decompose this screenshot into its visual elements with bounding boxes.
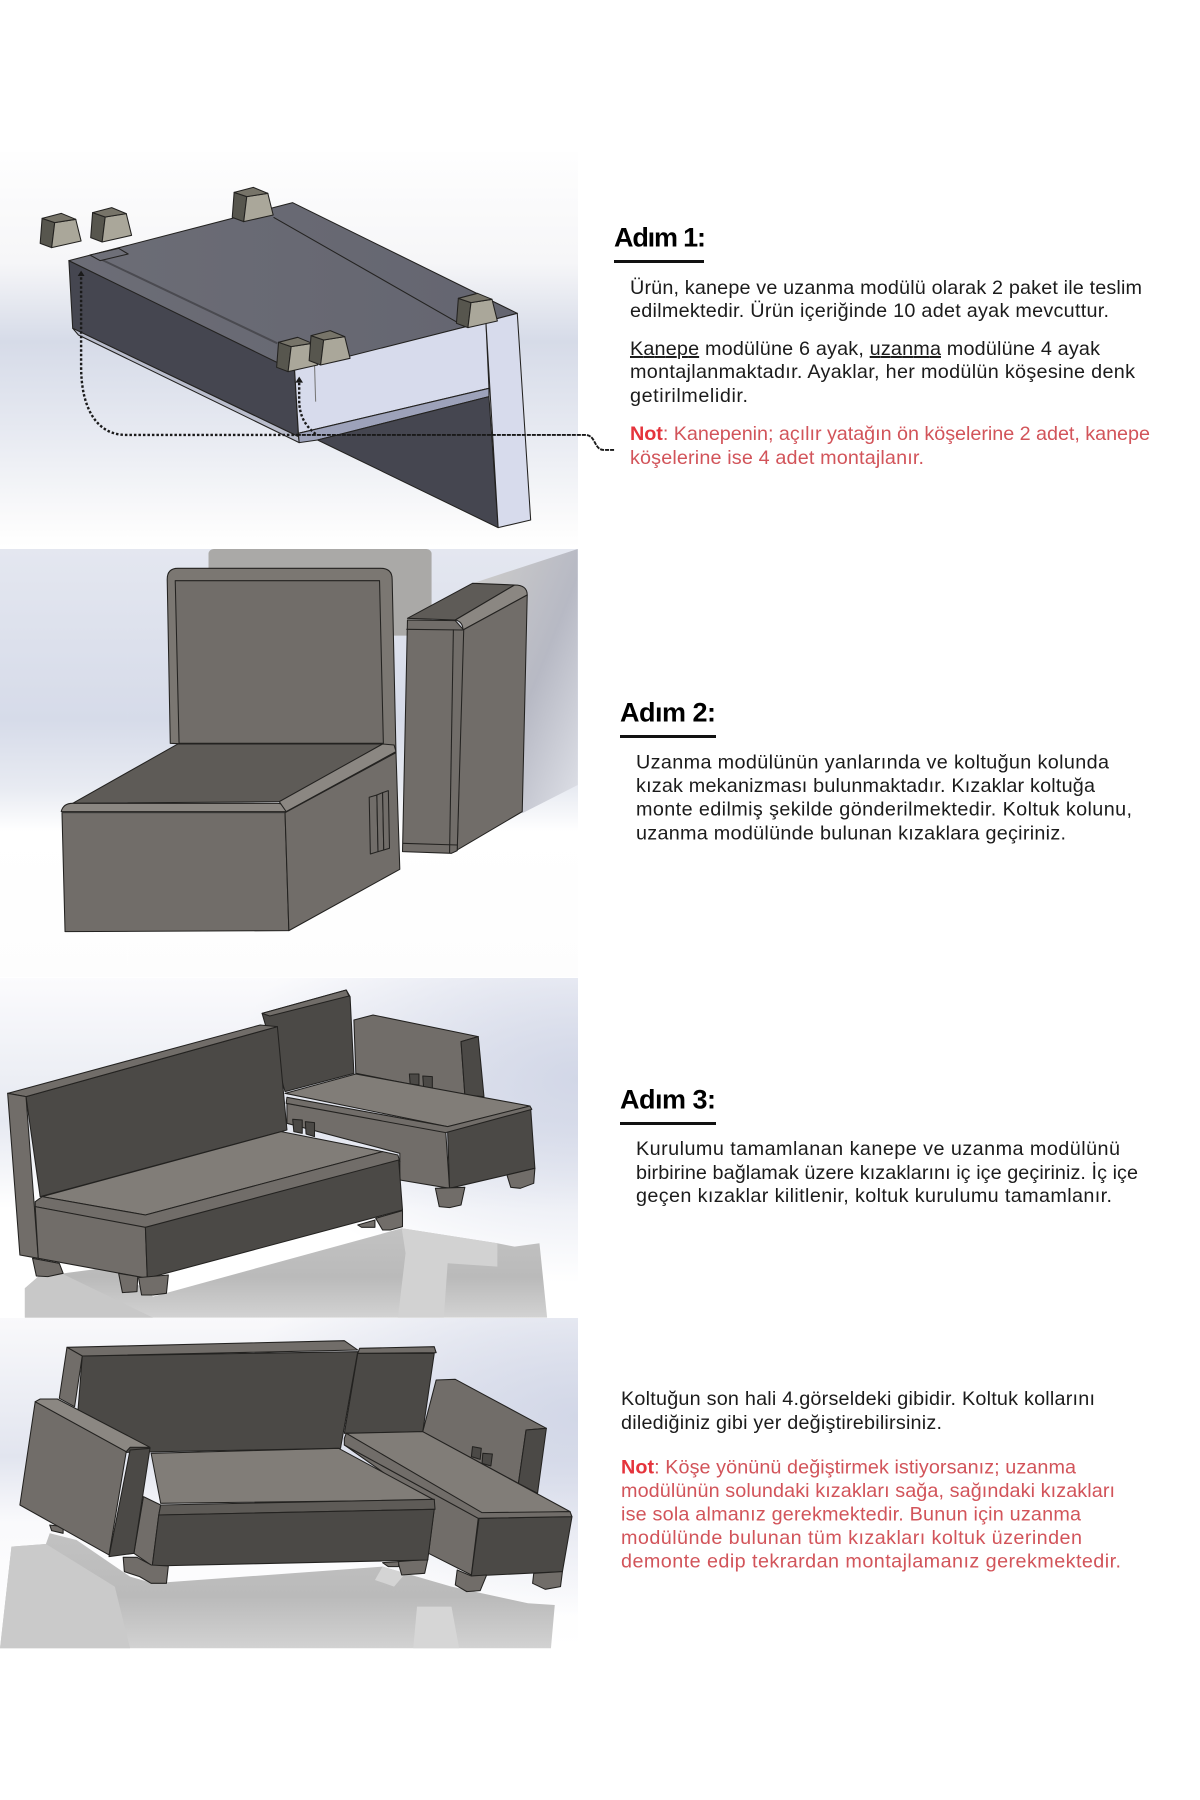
note: changing corner direction: ise sola almanız gerekmektedir. Bunun için uzanma [621, 1504, 1081, 1526]
step 4 text block: dilediğiniz gibi yer değiştirebilirsiniz. [621, 1412, 942, 1434]
panel: step 2 illustration, armchair module and arm [0, 549, 578, 977]
heading: Adım 2: Adım 2: [620, 698, 716, 728]
step 2 text block: kızak mekanizması bulunmaktadır. Kızaklar koltuğa [636, 775, 1095, 797]
arrowhead: rear [78, 271, 85, 276]
step 1 text block: köşelerine ise 4 adet montajlanır. [630, 447, 924, 469]
step 4 text block [621, 1388, 1121, 1572]
step 1 text block [614, 222, 1150, 469]
floor reflection [25, 1228, 547, 1318]
note: changing corner direction: Not: Köşe yönünü değiştirmek istiyorsanız; uzanma [621, 1456, 1076, 1478]
right chaise module [344, 1347, 572, 1592]
step 1 text block: edilmektedir. Ürün içeriğinde 10 adet ayak mevcuttur. [630, 300, 1109, 322]
heading: Adım 1: Adım 1: [614, 222, 706, 252]
floor reflection [0, 1533, 555, 1648]
left armrest [20, 1399, 150, 1557]
step 2 text block [620, 698, 1132, 844]
note: changing corner direction: demonte edip tekrardan montajlamanız gerekmektedir. [621, 1550, 1121, 1572]
step 3 text block: Kurulumu tamamlanan kanepe ve uzanma modülünü [636, 1138, 1120, 1160]
arm module [402, 583, 527, 853]
step 2 text block: uzanma modülünde bulunan kızaklara geçiriniz. [636, 822, 1066, 844]
step 1 text block: getirilmelidir. [630, 385, 748, 407]
centre seat [123, 1448, 435, 1583]
panel: step 1 illustration, sofa base with feet [0, 152, 614, 547]
note: changing corner direction: modülünde bulunan tüm kızakları koltuk üzerinden [621, 1527, 1082, 1549]
icon: sofa foot [309, 331, 350, 365]
step 1 text block: Ürün, kanepe ve uzanma modülü olarak 2 paket ile teslim [630, 277, 1142, 299]
front module [8, 1025, 402, 1295]
note: changing corner direction [621, 1456, 1121, 1572]
note: changing corner direction: modülünün solundaki kızakları sağa, sağındaki kızakları [621, 1480, 1115, 1502]
step 1 text block: montajlanmaktadır. Ayaklar, her modülün köşesine denk [630, 361, 1135, 383]
icon: sofa foot [40, 213, 81, 248]
icon: sofa foot [277, 337, 318, 372]
heading: Adım 3: Adım 3: [620, 1084, 716, 1114]
panel: step 4 illustration, assembled corner sofa [0, 1318, 578, 1649]
back cushion [59, 1341, 358, 1453]
step 3 text block: birbirine bağlamak üzere kızaklarını iç içe geçiriniz. İç içe [636, 1161, 1138, 1184]
arrow: dotted leader to front corner [299, 381, 316, 434]
icon: sofa foot [91, 208, 132, 242]
step 4 text block: Koltuğun son hali 4.görseldeki gibidir. Koltuk kollarını [621, 1388, 1095, 1410]
arrow: connector line to the note [298, 435, 614, 450]
step 1 text block: Not: Kanepenin; açılır yatağın ön köşelerine 2 adet, kanepe [630, 423, 1150, 445]
step 3 text block [620, 1084, 1138, 1207]
arrow: dotted leader to rear corner [81, 273, 298, 435]
panel: step 3 illustration, two modules apart [0, 978, 578, 1318]
icon: sliding bracket [369, 791, 389, 854]
icon: sofa foot [456, 293, 497, 328]
icon: sofa foot [232, 187, 273, 222]
rear module [262, 990, 535, 1208]
step 2 text block: Uzanma modülünün yanlarında ve koltuğun kolunda [636, 752, 1109, 774]
step 3 text block: geçen kızaklar kilitlenir, koltuk kurulumu tamamlanır. [636, 1185, 1112, 1207]
step 1 text block: Kanepe modülüne 6 ayak, uzanma modülüne 4 ayak [630, 338, 1100, 360]
arrowhead: front [295, 377, 303, 383]
step 2 text block: monte edilmiş şekilde gönderilmektedir. Koltuk kolunu, [636, 798, 1132, 820]
